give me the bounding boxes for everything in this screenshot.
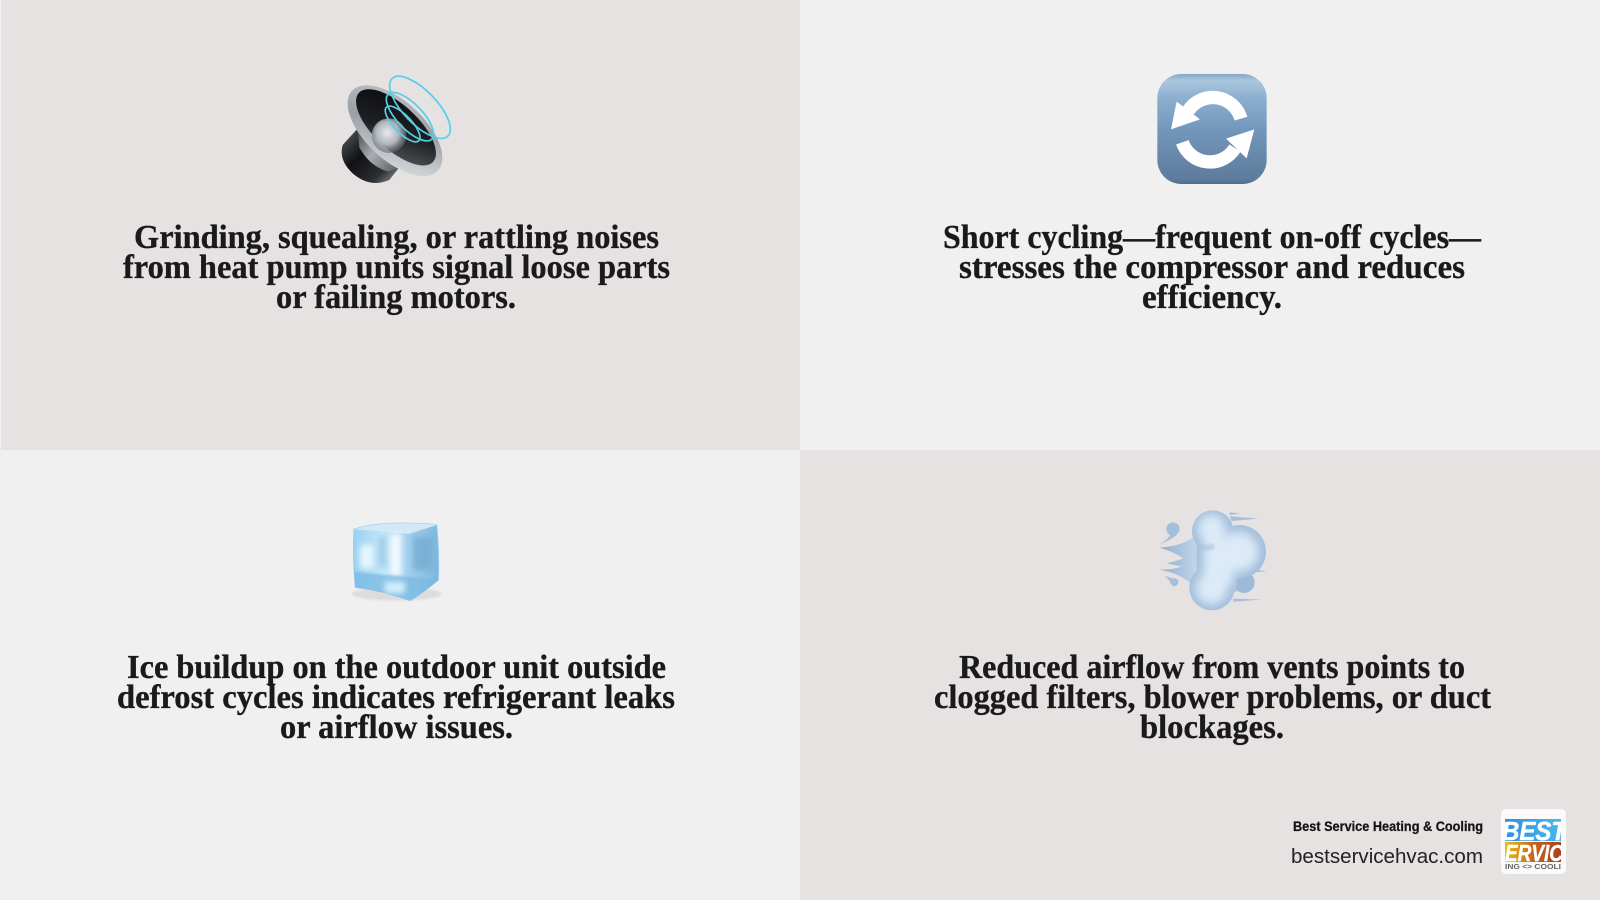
- text: short cycling: [943, 219, 1482, 316]
- icon: dash of air cloud: [1160, 510, 1266, 610]
- text: short cycling: Short cycling—frequent on-off cycles—: [943, 219, 1482, 256]
- logo: Best Service badge: [1501, 809, 1568, 874]
- logo: Best Service badge: ERVIC: [1505, 840, 1563, 866]
- text: reduced airflow: [934, 649, 1492, 746]
- logo: Best Service badge: BEST: [1502, 816, 1568, 846]
- footer: website: bestservicehvac.com: [1291, 846, 1483, 868]
- wind fan: [1159, 537, 1207, 585]
- text: reduced airflow: Reduced airflow from vents points to: [959, 649, 1465, 686]
- panel: short cycling: [800, 0, 1600, 450]
- logo: Best Service badge: ING <> COOLI: [1505, 864, 1561, 871]
- text: ice buildup: or airflow issues.: [280, 709, 513, 746]
- text: ice buildup: [117, 649, 675, 746]
- text: ice buildup: Ice buildup on the outdoor unit outside: [127, 649, 666, 686]
- icon: speaker with sound waves: [332, 67, 460, 192]
- text: reduced airflow: blockages.: [1140, 709, 1284, 746]
- text: grinding noises: [123, 219, 670, 316]
- text: ice buildup: defrost cycles indicates refrigerant leaks: [117, 679, 675, 716]
- icon: refresh arrows button: [1157, 74, 1267, 184]
- panel: ice buildup: [118, 522, 674, 739]
- icon: ice cube: [352, 522, 442, 601]
- footer: company name: Best Service Heating & Cooling: [1293, 819, 1483, 834]
- text: grinding noises: Grinding, squealing, or rattling noises: [134, 219, 659, 256]
- panel: reduced airflow: [800, 450, 1600, 900]
- text: short cycling: stresses the compressor and reduces: [959, 249, 1465, 286]
- panel: grinding noises: [1, 0, 800, 450]
- text: grinding noises: from heat pump units signal loose parts: [123, 249, 670, 286]
- text: short cycling: efficiency.: [1142, 279, 1282, 316]
- text: reduced airflow: clogged filters, blower problems, or duct: [934, 679, 1492, 716]
- text: grinding noises: or failing motors.: [276, 279, 516, 316]
